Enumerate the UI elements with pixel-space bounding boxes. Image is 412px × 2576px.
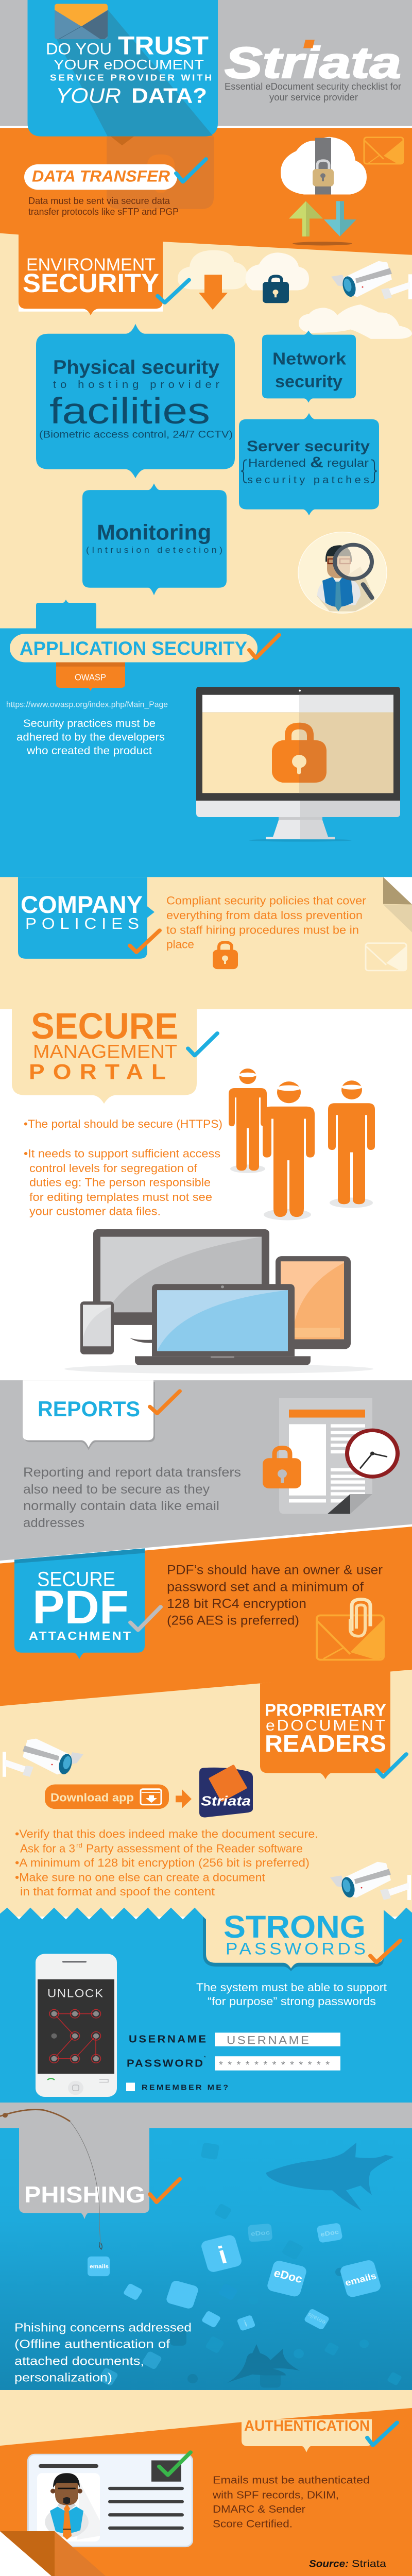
panel: application security heading [10,634,279,663]
title: DO YOU [46,40,112,58]
text: pdf body: PDF’s should have an owner & user [167,1564,383,1577]
text: authentication body: with SPF records, DKIM, [212,2490,339,2501]
icons: floating documents [88,2142,402,2387]
panel: secure management portal heading: SECURE [31,1005,178,1046]
text: portal bullets: your customer data files. [29,1205,161,1217]
panel: environment security heading [19,234,163,315]
form: login fields: ************* [219,2060,330,2071]
device: desktop [93,1229,269,1343]
text: data transfer body: Data must be sent via secure data [28,196,170,207]
text: application security body: adhered to by the developers [16,731,165,743]
text: authentication body: Score Certified. [213,2518,293,2530]
icon: striata app [199,1766,253,1818]
panel: monitoring: Monitoring [97,520,211,545]
panel: network security: Network [272,350,347,368]
arrows: upload and download [289,201,356,245]
panel: company policies heading [18,877,160,959]
panel: secure management portal heading: PORTAL [29,1060,166,1084]
icon: security guards [229,1069,375,1221]
icon: padlock reports [263,1448,301,1488]
panel: physical security: Physical security [53,357,219,378]
icon: camera left [3,1739,83,1777]
panel: authentication heading: AUTHENTICATION [244,2418,370,2434]
page fold corner [383,877,412,933]
text: OWASP url: https://www.owasp.org/index.php/Main_Page [6,700,168,709]
subtitle: your service provider [269,93,358,103]
icons: floating documents: i [215,2241,230,2269]
guard 1 [229,1069,267,1171]
text: data transfer body [28,196,179,217]
arrow down [199,275,228,310]
panel: strong passwords heading [195,1907,400,1971]
text: company policies body: everything from data loss prevention [166,909,363,922]
icons: floating documents: emails [344,2271,377,2288]
panel: server security: Server security [247,437,370,455]
logo: Striata: Striata [225,38,401,87]
text: strong passwords body [196,1981,387,2008]
panel: monitoring [82,483,227,595]
text: pdf body: (256 AES is preferred) [167,1614,299,1628]
panel: phishing heading: PHISHING [24,2181,145,2208]
icon: fishing rod and line [0,2110,102,2249]
panel: application security heading: APPLICATION SECURITY [20,638,247,659]
text: phishing body [14,2321,192,2384]
form: login fields: * [204,2055,206,2060]
text: reports body: also need to be secure as they [23,1483,210,1497]
panel: reports heading [23,1380,180,1450]
text: portal bullets: •It needs to support sufficient access [24,1147,220,1160]
illustration: id card [28,2452,193,2547]
panel: physical security: to hosting provider [53,379,219,391]
text: readers bullets: •Make sure no one else can create a document [15,1871,266,1884]
text: phishing body: attached documents, [14,2354,144,2368]
panel: proprietary readers heading: PROPRIETARY [265,1701,386,1720]
panel: proprietary readers heading: eDOCUMENT [266,1717,385,1734]
tag: OWASP: OWASP [75,672,106,682]
text: application security body: who created the product [26,744,152,757]
icons: floating documents: eDoc [251,2229,270,2238]
icons: floating documents: eDoc [272,2266,304,2285]
panel: proprietary readers heading [260,1671,406,1779]
text: reports body: addresses [23,1516,84,1530]
guard 2 [263,1081,315,1217]
icon: cloud with zip and padlock [281,137,367,194]
icons: floating documents: eDoc [320,2228,339,2238]
clouds [178,250,412,339]
panel: server security [239,413,379,516]
title: YOUR eDOCUMENT [54,57,204,72]
panel: server security: security patches [247,474,369,486]
icon: padlock orange [213,942,238,969]
panel: data transfer heading [24,159,206,190]
panel: company policies heading: POLICIES [25,914,139,933]
subtitle: Essential eDocument security checklist for [225,82,402,92]
text: phishing body: (Offline authentication of [14,2337,170,2351]
source credit: Source: [309,2558,349,2569]
text: authentication body [212,2475,370,2530]
icon: shark small [227,2344,300,2383]
text: application security body: Security practices must be [23,717,156,730]
button: download app: Download app [50,1791,134,1804]
tag: OWASP [56,663,125,691]
panel: physical security [36,324,235,478]
text: portal bullets [24,1117,222,1217]
text: application security body [16,717,165,757]
icon: clock [347,1430,398,1477]
text: reports body: Reporting and report data transfers [23,1466,241,1480]
text: authentication body: Emails must be authenticated [213,2475,370,2486]
panel: network security [262,330,356,403]
panel: physical security: facilities [49,390,210,431]
text: reports body [23,1466,241,1530]
panel: secure management portal heading [12,1005,217,1104]
device: tablet [276,1256,351,1349]
text: portal bullets: •The portal should be secure (HTTPS) [24,1117,222,1130]
text: readers bullets: rd [76,1842,82,1849]
text: portal bullets: duties eg: The person responsible [29,1176,211,1189]
text: portal bullets: for editing templates must not see [29,1191,212,1204]
unlock pattern [49,2009,101,2063]
form: login fields: PASSWORD [127,2058,203,2069]
illustration: unlock phone [36,1954,117,2097]
text: readers bullets: Ask for a 3 [20,1842,75,1855]
long shadow of envelope [57,9,213,145]
text: pdf body [167,1564,383,1628]
button: download app [45,1784,169,1809]
page fold bottom left [0,2531,106,2576]
guard 3 [328,1080,375,1204]
panel: secure pdf heading: ATTACHMENT [29,1630,131,1643]
icon: shark large [266,2143,393,2211]
panel: company policies heading: COMPANY [21,891,143,919]
icon: padlock navy [263,276,289,303]
illustration: unlock phone: UNLOCK [47,1987,104,1999]
panel: secure pdf heading: PDF [32,1581,129,1634]
text: phishing body: personalization) [14,2371,112,2384]
illustration: desktop monitor with padlock [196,687,400,842]
text: strong passwords body: The system must be able to support [196,1981,387,1994]
title: YOUR [56,84,121,108]
panel: secure pdf heading [14,1548,161,1659]
tail connector into application security [36,600,96,629]
panel: network security: security [275,372,343,391]
text: readers bullets: •A minimum of 128 bit encryption (256 bit is preferred) [15,1856,310,1869]
panel: proprietary readers heading: READERS [265,1731,386,1757]
icon: faint envelope [366,943,406,971]
panel: strong passwords heading: STRONG [224,1909,366,1945]
panel: environment security heading: SECURITY [23,268,159,298]
text: readers bullets: Party assessment of the Reader software [86,1842,303,1855]
text: readers bullets: •Verify that this does indeed make the document secure. [15,1827,318,1840]
title: SERVICE PROVIDER WITH [50,73,212,83]
panel: server security: & [310,453,323,471]
icon: envelope outline [364,138,403,164]
form: login fields: REMEMBER ME? [142,2083,228,2092]
portrait [45,2473,100,2539]
text: pdf body: password set and a minimum of [167,1581,364,1594]
form: login fields: USERNAME [227,2033,309,2046]
text: company policies body: place [166,938,194,951]
text: readers bullets: in that format and spoof the content [20,1885,215,1898]
icon: striata app: Striata [201,1794,251,1808]
panel: strong passwords heading: PASSWORDS [226,1940,366,1958]
panel: reports heading: REPORTS [38,1397,140,1421]
text: company policies body [166,894,366,951]
panel: secure management portal heading: MANAGEMENT [33,1041,177,1062]
illustration: devices [64,1229,373,1374]
title [46,31,212,108]
panel: secure pdf heading: SECURE [37,1568,115,1590]
panel: monitoring: (Intrusion detection) [86,545,222,555]
form: login fields: USERNAME [129,2033,206,2045]
icon: report document [279,1398,372,1514]
text: phishing body: Phishing concerns addressed [14,2321,192,2334]
icons: floating documents: i [243,2318,249,2329]
source credit [309,2558,387,2569]
form: login fields [126,2032,340,2092]
text: pdf body: 128 bit RC4 encryption [167,1597,306,1611]
title: DATA? [131,84,207,108]
title: TRUST [118,31,209,60]
text: company policies body: Compliant security policies that cover [166,894,366,907]
text: readers bullets [15,1827,318,1898]
icon: envelope with paperclip [317,1599,384,1660]
panel: data transfer heading: DATA TRANSFER [32,167,170,185]
check [158,280,189,302]
panel: phishing heading [19,2128,180,2219]
device: laptop [135,1284,311,1365]
panel: server security: Hardened [248,456,306,469]
text: authentication body: DMARC & Sender [213,2504,305,2515]
icon: envelope [55,4,108,39]
subtitle [225,82,402,103]
text: portal bullets: control levels for segregation of [29,1162,198,1175]
arrow to app [176,1789,192,1808]
panel: server security: regular [327,456,369,469]
panel: environment security heading: ENVIRONMENT [26,255,156,275]
device: phone [80,1301,114,1354]
text: reports body: normally contain data like email [23,1499,219,1513]
text: company policies body: to staff hiring procedures must be in [166,923,359,936]
icon: inspector with magnifier [298,532,387,613]
icon: camera right [330,1862,411,1900]
icon: security camera top [331,261,412,299]
shadow block behind data transfer [107,137,214,209]
source credit: Striata [352,2558,387,2569]
header panel: speech bubble [28,0,218,145]
panel: authentication heading [242,2418,397,2452]
icons: floating documents: emails [90,2264,109,2269]
panel: physical security: (Biometric access control, 24/7 CCTV) [39,429,233,440]
text: data transfer body: transfer protocols like sFTP and PGP [28,207,179,217]
icons: floating documents: emails [306,2311,327,2325]
text: strong passwords body: “for purpose” strong passwords [208,1995,376,2008]
